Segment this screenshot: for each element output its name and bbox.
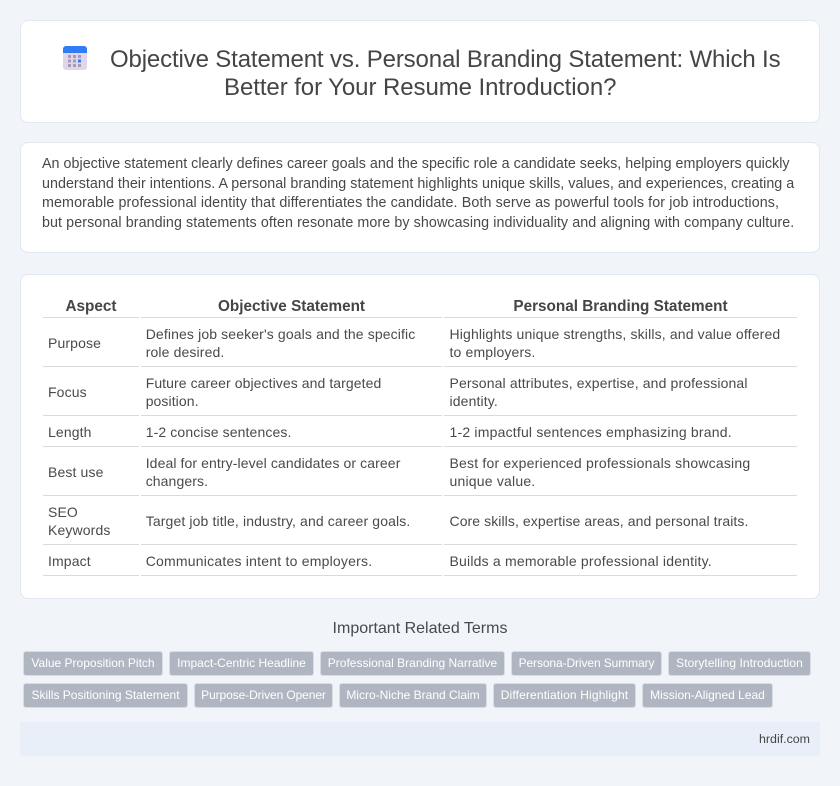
tag: [493, 683, 636, 708]
panel: introduction paragraph: [20, 142, 820, 253]
row: focus: [48, 375, 748, 409]
panel: title card: [20, 20, 820, 123]
tag: [23, 651, 163, 676]
row: best use: unique value.: [450, 473, 535, 489]
row: focus: identity.: [450, 393, 498, 409]
footer: [20, 722, 820, 756]
footer source: hrdif.com: [759, 732, 810, 746]
title: [110, 46, 780, 101]
row: best use: Best for experienced professionals showcasing: [450, 455, 750, 471]
row: purpose: role desired.: [146, 344, 224, 360]
title: Objective Statement vs. Personal Branding Statement: Which Is: [110, 46, 780, 73]
text block: introduction: [42, 156, 794, 231]
panel: comparison table: [20, 274, 820, 599]
row: impact: [48, 553, 712, 569]
text block: introduction: understand their intentions. A personal branding statement highlights unique skills, values, and experiences, creating a: [42, 176, 794, 192]
tag: Mission-Aligned Lead: [650, 688, 765, 702]
table header: Personal Branding Statement: [513, 298, 728, 315]
title: Better for Your Resume Introduction?: [224, 74, 616, 101]
tag: [194, 683, 333, 708]
row: focus: Personal attributes, expertise, and professional: [450, 375, 748, 391]
row: purpose: Highlights unique strengths, skills, and value offered: [450, 326, 780, 342]
tag: Differentiation Highlight: [501, 688, 628, 702]
table header: [65, 298, 728, 315]
row: best use: changers.: [146, 473, 208, 489]
row: best use: [48, 455, 750, 489]
tag: Persona-Driven Summary: [519, 656, 654, 670]
tag: [169, 651, 314, 676]
tag: Micro-Niche Brand Claim: [346, 688, 480, 702]
row: seo keywords: Keywords: [48, 522, 111, 538]
heading: important related terms: Important Related Terms: [333, 620, 507, 637]
row: best use: Ideal for entry-level candidates or career: [146, 455, 400, 471]
tag: Professional Branding Narrative: [328, 656, 497, 670]
row: purpose: Purpose: [48, 335, 101, 351]
row: length: [48, 424, 732, 440]
text block: introduction: memorable professional identity that differentiates the candidate. Both serve as powerful tools for job introductions,: [42, 195, 779, 211]
row: length: Length: [48, 424, 92, 440]
tag: Skills Positioning Statement: [31, 688, 180, 702]
tag: Purpose-Driven Opener: [201, 688, 326, 702]
row: best use: Best use: [48, 464, 104, 480]
row: purpose: Defines job seeker's goals and the specific: [146, 326, 415, 342]
icon: calendar: [63, 46, 87, 70]
row: seo keywords: Core skills, expertise areas, and personal traits.: [450, 513, 748, 529]
row: impact: Communicates intent to employers.: [146, 553, 372, 569]
row: focus: Focus: [48, 384, 87, 400]
row: length: 1-2 impactful sentences emphasizing brand.: [450, 424, 732, 440]
tags: related terms: [23, 651, 811, 708]
row: purpose: to employers.: [450, 344, 535, 360]
text block: introduction: An objective statement clearly defines career goals and the specific role a candidate seeks, helping employers quickly: [42, 156, 790, 172]
tag: Impact-Centric Headline: [177, 656, 306, 670]
row: seo keywords: SEO: [48, 504, 78, 520]
tag: [668, 651, 811, 676]
tag: Value Proposition Pitch: [31, 656, 155, 670]
table header: Objective Statement: [218, 298, 365, 315]
text block: introduction: but personal branding statements often resonate more by showcasing individuality and aligning with company culture.: [42, 215, 794, 231]
tag: [642, 683, 773, 708]
tag: [23, 683, 188, 708]
row: impact: Impact: [48, 553, 91, 569]
row: seo keywords: [48, 504, 748, 538]
row: seo keywords: Target job title, industry, and career goals.: [146, 513, 410, 529]
tag: [511, 651, 662, 676]
tag: Storytelling Introduction: [676, 656, 803, 670]
row: focus: Future career objectives and targeted: [146, 375, 381, 391]
table header: Aspect: [65, 298, 116, 315]
tag: [320, 651, 505, 676]
row: focus: position.: [146, 393, 199, 409]
row: length: 1-2 concise sentences.: [146, 424, 292, 440]
row: impact: Builds a memorable professional identity.: [450, 553, 712, 569]
tag: [339, 683, 487, 708]
row: purpose: [48, 326, 780, 360]
